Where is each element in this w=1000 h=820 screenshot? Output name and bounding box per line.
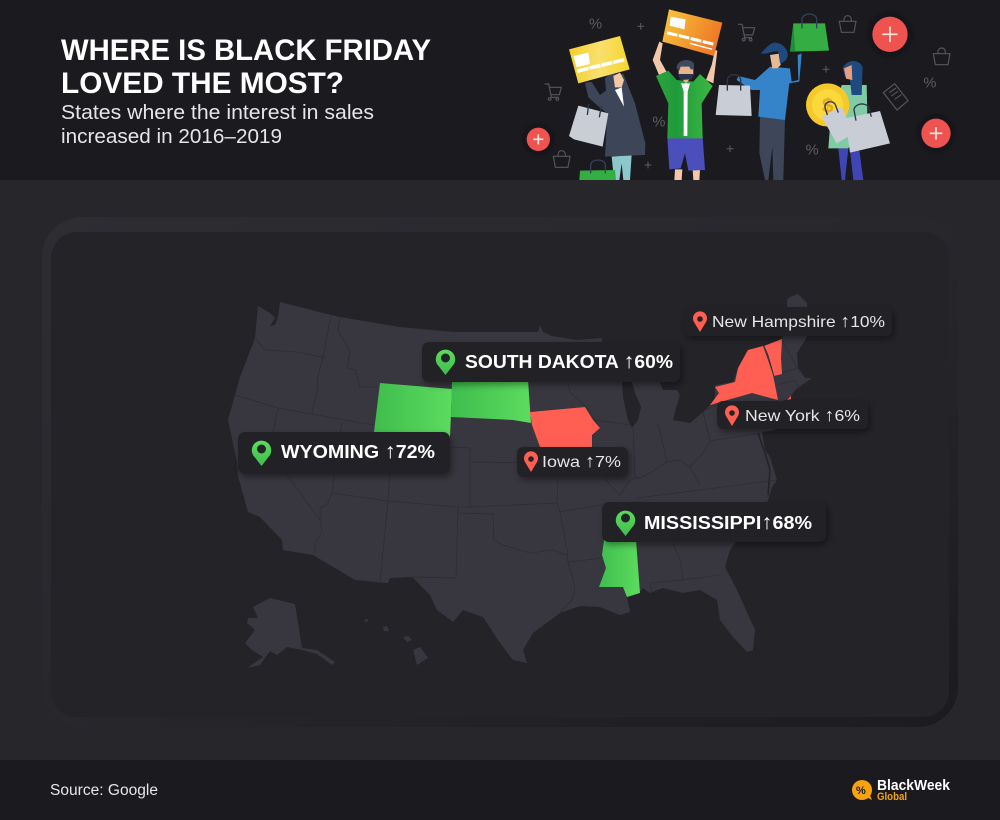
- decorative icons: percent signs, plus signs, carts and baskets: %: [589, 16, 602, 32]
- woman with yellow card: [569, 36, 645, 180]
- subtitle: increased in 2016–2019: [61, 125, 282, 148]
- state: new hampshire highlight: [764, 339, 782, 376]
- state borders: [235, 315, 800, 613]
- label: new hampshire: [684, 307, 892, 336]
- label text: Iowa ↑7%: [542, 451, 621, 471]
- subtitle: [61, 101, 374, 148]
- alaska: [245, 598, 335, 668]
- icon: green pin: [616, 511, 635, 536]
- logo: BlackWeek Global: Global: [877, 791, 907, 803]
- hawaii: [364, 619, 428, 665]
- source note: Source: Google: [50, 782, 158, 799]
- footer band: [0, 760, 1000, 820]
- icon: red pin: [693, 311, 707, 332]
- title: LOVED THE MOST?: [61, 67, 344, 100]
- decorative icons: percent signs, plus signs, carts and baskets: %: [806, 143, 819, 159]
- icon: red pin: [524, 451, 538, 472]
- panel: map card: [42, 217, 958, 727]
- illustration: shoppers: [524, 9, 953, 180]
- decorative icons: percent signs, plus signs, carts and baskets: %: [923, 75, 936, 91]
- title: [61, 34, 431, 100]
- label: mississippi: [602, 502, 826, 542]
- title: WHERE IS BLACK FRIDAY: [61, 34, 431, 67]
- state: south dakota: [451, 380, 531, 423]
- decorative icons: percent signs, plus signs, carts and baskets: [545, 16, 950, 168]
- state: mississippi: [599, 540, 640, 597]
- label text: WYOMING ↑72%: [281, 440, 435, 463]
- logo: BlackWeek Global: [852, 777, 951, 803]
- label text: New Hampshire ↑10%: [712, 311, 885, 331]
- state: iowa: [530, 407, 600, 447]
- contiguous states landmass: [228, 294, 812, 663]
- subtitle: States where the interest in sales: [61, 101, 374, 124]
- state: wyoming: [374, 383, 452, 437]
- logo: BlackWeek Global: BlackWeek: [877, 777, 951, 794]
- icon: percent bubble: %: [856, 785, 866, 797]
- label: iowa: [517, 447, 628, 477]
- icon: green pin: [252, 441, 271, 466]
- label: wyoming: [238, 432, 450, 474]
- map: United States: [228, 294, 812, 668]
- header band: [0, 0, 1000, 180]
- woman with gold coin and bags: [806, 61, 890, 180]
- label: south dakota: [422, 342, 680, 382]
- state: new york: [710, 346, 791, 405]
- woman with gold coin and bags: $: [822, 95, 834, 118]
- label text: MISSISSIPPI ↑68%: [644, 511, 812, 534]
- icon: green pin: [436, 350, 455, 375]
- red plus badges: [524, 14, 953, 153]
- label text: SOUTH DAKOTA ↑60%: [465, 350, 673, 373]
- label: new york: [717, 401, 868, 429]
- label text: New York ↑6%: [745, 405, 860, 425]
- decorative icons: percent signs, plus signs, carts and baskets: %: [652, 115, 665, 131]
- man with orange card: [653, 9, 722, 180]
- person in blue with shopping bags: [716, 14, 829, 180]
- icon: red pin: [725, 405, 739, 426]
